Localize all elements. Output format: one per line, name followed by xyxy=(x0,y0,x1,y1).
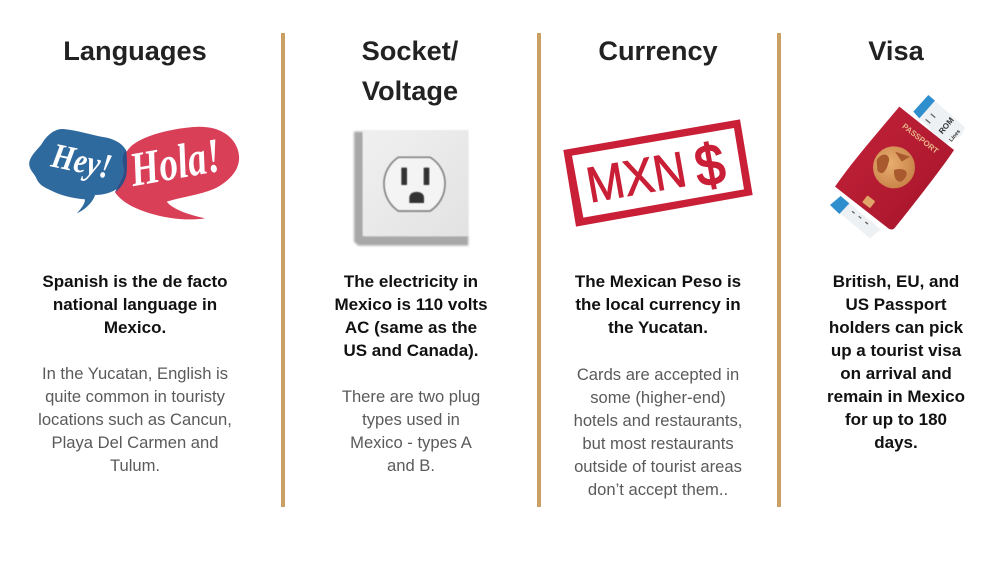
panel: socket and voltage: There are two plug xyxy=(342,387,480,406)
text: languages detail xyxy=(38,364,232,475)
panel: socket and voltage: types used in xyxy=(362,410,460,429)
panel: socket and voltage: AC (same as the xyxy=(345,318,477,337)
heading: Socket/Voltage xyxy=(362,35,458,106)
panel: currency: but most restaurants xyxy=(582,434,734,453)
panel: currency: the Yucatan. xyxy=(608,318,708,337)
panel: visa: British, EU, and xyxy=(833,272,959,291)
panel: visa: holders can pick xyxy=(829,318,963,337)
panel: languages: quite common in touristy xyxy=(45,387,225,406)
icon: MXN$ stamp xyxy=(563,119,753,227)
panel: languages: Mexico. xyxy=(104,318,166,337)
panel: socket and voltage: Socket/ xyxy=(362,35,458,66)
panel: visa: on arrival and xyxy=(840,364,952,383)
panel: languages: national language in xyxy=(53,295,217,314)
panel: currency: hotels and restaurants, xyxy=(574,411,742,430)
panel: socket and voltage: Mexico - types A xyxy=(350,433,472,452)
divider: languages / socket xyxy=(281,33,284,507)
panel: visa: days. xyxy=(874,433,918,452)
icon: passport with boarding passes: ROM xyxy=(937,115,956,136)
icon: Hey and Hola speech bubbles xyxy=(29,126,240,220)
text: currency bold statement xyxy=(575,272,741,337)
icon: MXN$ stamp: MXN xyxy=(582,142,690,214)
divider: socket / currency xyxy=(537,33,540,507)
icon: MXN$ stamp: $ xyxy=(690,131,730,199)
panel: languages: In the Yucatan, English is xyxy=(42,364,228,383)
panel: socket and voltage: Mexico is 110 volts xyxy=(334,295,488,314)
panel: currency: outside of tourist areas xyxy=(574,457,742,476)
text: languages bold statement xyxy=(42,272,228,337)
panel: languages: Playa Del Carmen and xyxy=(52,433,218,452)
panel: visa: for up to 180 xyxy=(845,410,947,429)
panel: visa: US Passport xyxy=(845,295,947,314)
panel: currency: the local currency in xyxy=(575,295,741,314)
icon: passport with boarding passes: PASSPORT xyxy=(900,122,940,156)
heading: Currency: Currency xyxy=(598,35,718,66)
panel: languages: Tulum. xyxy=(110,456,160,475)
text: socket detail xyxy=(342,387,480,475)
panel: currency: The Mexican Peso is xyxy=(575,272,741,291)
icon: passport with boarding passes xyxy=(830,95,965,238)
panel: currency: don’t accept them.. xyxy=(588,480,728,499)
icon: Hey and Hola speech bubbles: Hey! xyxy=(47,136,115,187)
icon: Hey and Hola speech bubbles: Hola! xyxy=(125,128,225,197)
panel: currency: Cards are accepted in xyxy=(577,365,739,384)
icon: wall socket xyxy=(352,130,470,247)
panel: socket and voltage: The electricity in xyxy=(344,272,478,291)
panel: visa: remain in Mexico xyxy=(827,387,965,406)
panel: languages: locations such as Cancun, xyxy=(38,410,232,429)
panel: socket and voltage: US and Canada). xyxy=(343,341,479,360)
text: socket bold statement xyxy=(334,272,488,360)
heading: Languages: Languages xyxy=(63,35,207,66)
text: currency detail xyxy=(574,365,742,499)
panel: socket and voltage: Voltage xyxy=(362,75,458,106)
heading: Visa: Visa xyxy=(868,35,924,66)
divider: currency / visa xyxy=(777,33,780,507)
panel: socket and voltage: and B. xyxy=(387,456,435,475)
panel: languages: Spanish is the de facto xyxy=(42,272,228,291)
text: visa bold statement xyxy=(827,272,965,452)
panel: visa: up a tourist visa xyxy=(831,341,961,360)
icon: passport with boarding passes: Lines xyxy=(948,129,962,143)
panel: currency: some (higher-end) xyxy=(590,388,726,407)
